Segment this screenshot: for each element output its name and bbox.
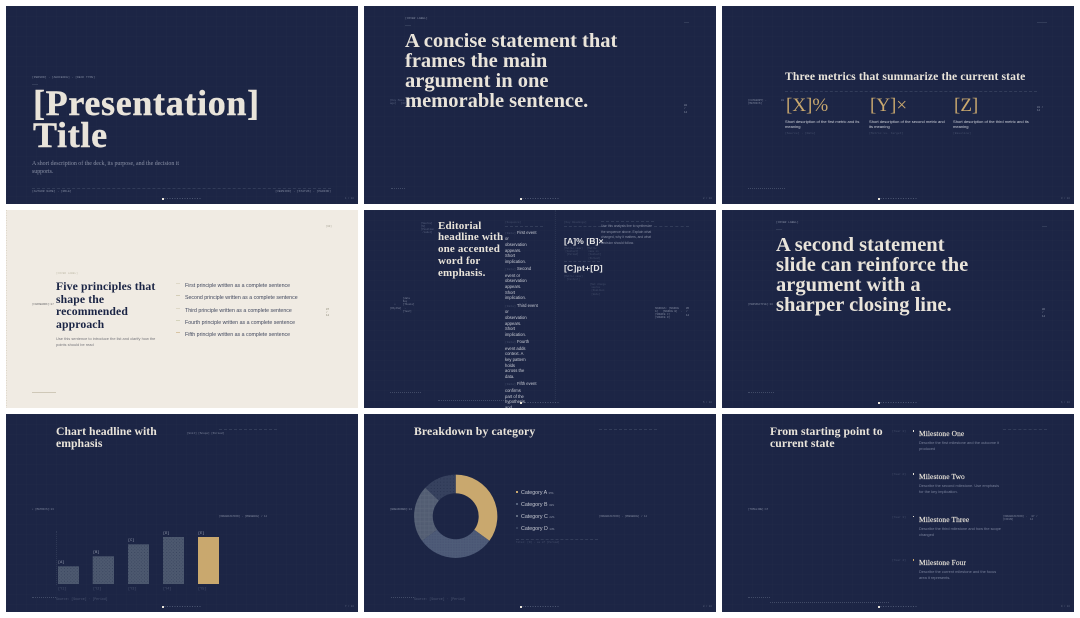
right meta: [ORGANIZATION] · [PRESENCE] / 14 (599, 515, 647, 518)
bar chart: [A] (58, 560, 64, 565)
panel: timeline slide (722, 414, 1074, 612)
headline: A concise statement that frames the main argument in one memorable sentence. (405, 30, 617, 112)
milestone 3: Describe the third milestone and how the scope changed (919, 526, 1001, 537)
right meta: [ORGANIZATION] · 07 / [FOCUS] 14 (1003, 515, 1038, 521)
source: Source: [Source] · [Period] (414, 597, 466, 601)
panel: title slide (6, 6, 358, 204)
description: A short description of the deck, its purpose, and the decision it supports. (32, 161, 179, 175)
page number: 8 / 14 (703, 605, 712, 608)
bar chart: [C] (128, 538, 134, 543)
title: [Presentation] Title (33, 83, 260, 155)
metric 3: [Z] (954, 95, 978, 116)
headline: Five principles that shape the recommended approach (56, 280, 155, 331)
page number: 3 / 14 (1061, 197, 1070, 200)
side counter: 06 / 14 (1042, 308, 1045, 318)
bar chart: [E] (198, 531, 204, 536)
milestone 2 (892, 472, 999, 494)
reading captions 2: [Metric name] [Context] (564, 274, 583, 281)
total note: Total: [N] · as of [Period] (516, 540, 560, 544)
event 2: [Date] Second event or observation appears. Short implication. (505, 266, 531, 300)
metric 1: [X]% (786, 95, 828, 116)
right meta: [ORGANIZATION] · [PRESENCE] / 14 (219, 515, 267, 518)
readings heading: [Key Readings] (564, 220, 587, 224)
side label: [CATEGORY] · [METRICS] (748, 99, 767, 105)
panel: second statement slide (722, 210, 1074, 408)
side counter: 02 / 14 (684, 104, 687, 114)
top marker: [04] (326, 224, 332, 228)
panel: bar chart slide (6, 414, 358, 612)
page number: 2 / 14 (703, 197, 712, 200)
metric 1: [Source] · [Date] (785, 132, 816, 135)
page number: 6 / 14 (1061, 401, 1070, 404)
bar chart (58, 531, 219, 592)
source notes: SOURCES: [SOURCE A] [SOURCE B] · [SOURCE C] [SOURCE D] (655, 307, 682, 319)
panel: metrics slide: 01 (781, 99, 784, 102)
source: Source: [Source] · [Period] (56, 597, 108, 601)
headline: A second statement slide can reinforce the argument with a sharper closing line. (776, 234, 968, 316)
metric 2: [Metric vs. target] (869, 132, 903, 135)
milestone 1 (892, 429, 999, 451)
event 1: [Date] First event or observation appears. Short implication. (505, 230, 537, 264)
side label: • [METRICS]:13 (32, 508, 54, 511)
headline: Breakdown by category (414, 424, 535, 438)
side label: [BREAKDOWN]:14 (390, 508, 412, 511)
reading captions 3: [Net change source [Position [date] (590, 283, 606, 296)
panel: editorial timeline slide (364, 210, 716, 408)
analysis text: Use this analysis line to synthesize the sequence above. Explain what changed, why it matters, and what decision should follow. (601, 224, 652, 245)
legend: Category A 35% Category B 30% Category C 22% Category D 13% (521, 490, 554, 532)
milestone 2: Describe the second milestone. Use emphasis for the key implication. (919, 482, 999, 494)
milestone 1: Milestone One (919, 429, 964, 438)
intro text: Use this sentence to introduce the list and clarify how the points should be read (56, 336, 155, 347)
sequence heading: [Sequence] (505, 220, 521, 224)
label: [COVER LABEL] (405, 16, 428, 20)
metric 3: Short description of the third metric and its meaning (953, 118, 1029, 129)
side counter: 05 / 14 (686, 307, 689, 317)
milestone 4 (892, 558, 996, 580)
side counter: 07 / 14 (326, 308, 329, 317)
headline: Chart headline with emphasis (56, 424, 157, 450)
event 3: [Date] Third event or observation appears. Short implication. (505, 302, 538, 337)
label: [COVER LABEL] (56, 272, 78, 274)
milestone 4: Describe the current milestone and the focus area it represents. (919, 568, 996, 580)
footer right: [VERSION] · [STATUS] · [PERIOD] (275, 190, 331, 193)
readings figure 1: [A]% [B]× (564, 236, 604, 246)
page number: 1 / 14 (345, 197, 354, 200)
side label: [Key Mess- age] [03] (390, 98, 407, 105)
metric 1: Short description of the first metric and its meaning (785, 118, 859, 129)
milestone 3 (892, 515, 1001, 537)
event 4: [Date] Fourth event adds context. A key pattern holds across the data. (505, 339, 529, 379)
side label: [FRAMEWORK]:07 (32, 303, 54, 306)
milestone 1: [Year 1] (892, 430, 906, 433)
reading captions 1: [Metric name] [Metric [Context] name in [Period] [Context] [Period] (564, 247, 601, 260)
label: [COVER LABEL] (776, 220, 799, 224)
principles list: First principle written as a complete sentence Second principle written as a complete sentence Third principle written as a complete sentence Fourth principle written as a complete sentence Fifth principle written as a complete sentence (185, 283, 298, 338)
small meta label: [Source] [N] [Position /Label] (421, 222, 434, 234)
panel: principles slide (6, 210, 358, 408)
footer left: [AUTHOR NAME] · [ROLE] (32, 190, 72, 193)
headline: Three metrics that summarize the current state (785, 70, 1025, 83)
bar chart: [D] (163, 531, 169, 536)
headline: From starting point to current state (770, 425, 883, 450)
milestone 3: Milestone Three (919, 515, 969, 524)
milestone 2: Milestone Two (919, 472, 965, 481)
readings figure 2: [C]pt+[D] (564, 262, 603, 272)
metric 1 (785, 95, 860, 135)
bar chart: [Y2] (93, 586, 101, 592)
donut chart (414, 474, 498, 558)
side counter: 01 / 14 (1037, 106, 1043, 112)
side label: [TIMELINE]:17 (748, 508, 768, 511)
bar chart: [Y1] (58, 586, 66, 592)
panel: statement slide (364, 6, 716, 204)
eyebrow: [PERSON] · [AUDIENCE] · [DECK TYPE] (32, 76, 95, 79)
chart meta: [Unit] [Scope] [Period] (187, 432, 224, 435)
bar chart: [B] (93, 550, 99, 555)
page number: 5 / 14 (703, 401, 712, 404)
page number: 9 / 14 (1061, 605, 1070, 608)
page number: 7 / 14 (345, 605, 354, 608)
milestone 4: [Year 4] (892, 559, 906, 562)
bar chart: [Y5] (198, 586, 206, 592)
headline: Editorial headline with one accented word for emphasis. (438, 220, 503, 278)
left meta: [date Key • [Thesis] [Rhythm] · [Year] (390, 296, 414, 313)
metric 2 (869, 95, 945, 135)
metric 2: Short description of the second metric and its meaning (869, 118, 945, 129)
bar chart: [Y4] (163, 586, 171, 592)
milestone 4: Milestone Four (919, 558, 966, 567)
metric 3: [Baseline] (953, 132, 971, 135)
milestone 3: [Year 3] (892, 516, 906, 519)
side label: [PERSPECTIVE]:16 (748, 302, 773, 306)
milestone 1: Describe the first milestone and the outcome it produced (919, 440, 999, 451)
milestone 2: [Year 2] (892, 473, 906, 476)
panel: donut chart slide (364, 414, 716, 612)
panel: metrics slide (722, 6, 1074, 204)
metric 3 (953, 95, 1029, 135)
metric 2: [Y]× (870, 95, 907, 116)
bar chart: [Y3] (128, 586, 136, 592)
